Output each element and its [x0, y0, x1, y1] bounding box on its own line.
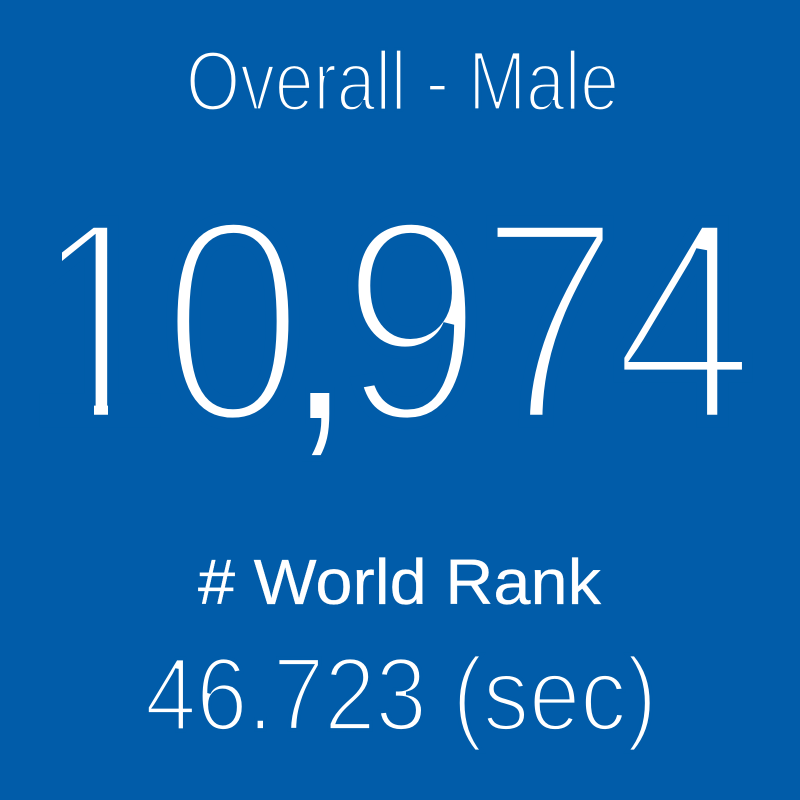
main number: 10,974 [26, 159, 755, 483]
subheading: # World Rank [198, 546, 602, 618]
title: Overall - Male [186, 34, 619, 128]
time value: 46.723 (sec) [145, 637, 657, 753]
